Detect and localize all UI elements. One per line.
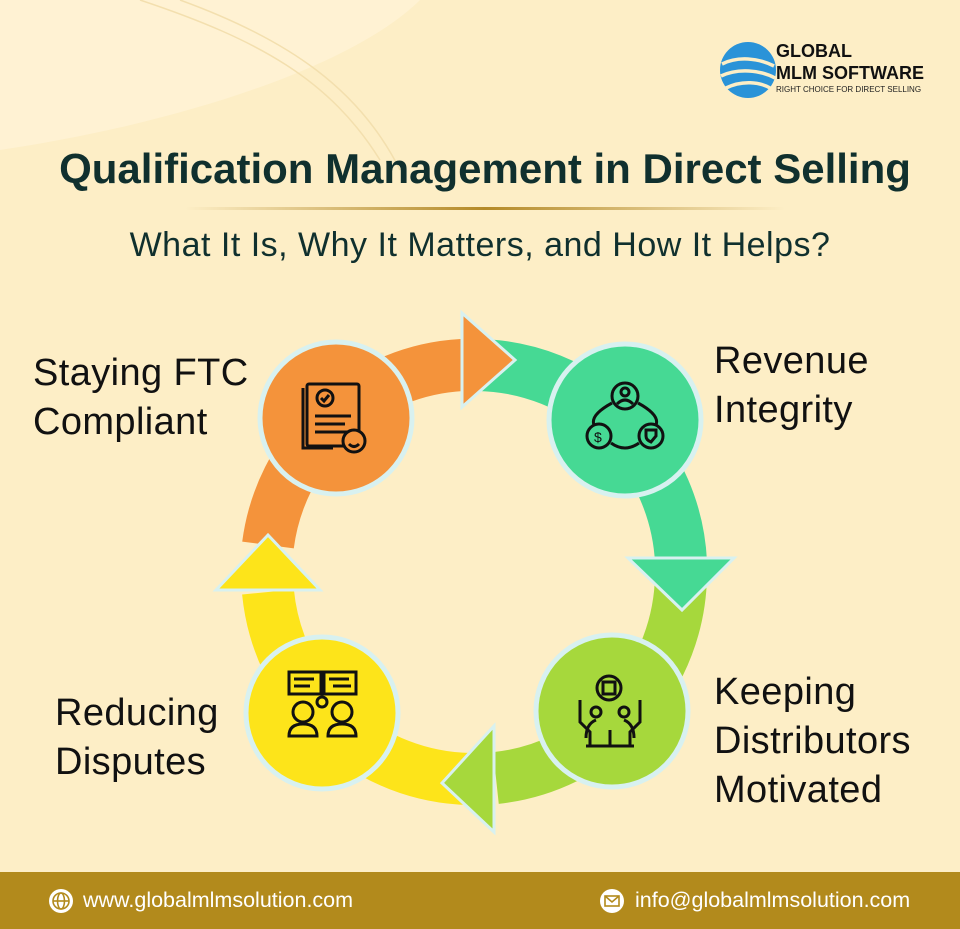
circle: lime with icon bbox=[536, 635, 688, 787]
arrow: orange head bbox=[462, 313, 515, 407]
subtitle: What It Is, Why It Matters, and How It Helps? bbox=[130, 226, 830, 264]
label: Keeping Distributors Motivated: Motivated bbox=[714, 769, 882, 811]
logo text: MLM SOFTWARE bbox=[776, 63, 924, 83]
label: Reducing Disputes: Disputes bbox=[55, 741, 206, 783]
arc: lime bbox=[496, 575, 681, 778]
label: Reducing Disputes bbox=[55, 692, 219, 783]
label: Reducing Disputes: Reducing bbox=[55, 692, 219, 734]
title: Qualification Management in Direct Selling bbox=[59, 145, 911, 192]
icon: email bbox=[600, 889, 624, 913]
logo bbox=[720, 41, 924, 98]
icon: web bbox=[49, 889, 73, 913]
arrow: yellow head bbox=[216, 535, 320, 590]
logo text bbox=[776, 41, 924, 83]
tagline: RIGHT CHOICE FOR DIRECT SELLING bbox=[776, 85, 921, 94]
arc: green bbox=[478, 365, 681, 562]
circle: green with icon bbox=[549, 344, 701, 496]
circle: green with icon: $ bbox=[594, 429, 602, 445]
icon: globe bbox=[720, 42, 776, 98]
label: Keeping Distributors Motivated: Keeping bbox=[714, 671, 856, 713]
label: Staying FTC Compliant: Compliant bbox=[33, 401, 208, 443]
label: Revenue Integrity: Revenue bbox=[714, 340, 869, 382]
label: Staying FTC Compliant bbox=[33, 352, 249, 443]
email text: info@globalmlmsolution.com bbox=[635, 888, 910, 912]
label: Keeping Distributors Motivated: Distributors bbox=[714, 720, 911, 762]
logo text: GLOBAL bbox=[776, 41, 852, 61]
circle: orange with icon bbox=[260, 342, 412, 494]
arrow: green head bbox=[628, 558, 734, 610]
arc: orange bbox=[268, 365, 462, 545]
arrow: lime head bbox=[442, 726, 494, 832]
divider bbox=[185, 207, 785, 210]
circle: yellow with icon bbox=[246, 637, 398, 789]
label: Revenue Integrity: Integrity bbox=[714, 389, 853, 431]
label: Keeping Distributors Motivated bbox=[714, 671, 911, 811]
website text: www.globalmlmsolution.com bbox=[83, 888, 353, 912]
label: Revenue Integrity bbox=[714, 340, 869, 431]
label: Staying FTC Compliant: Staying FTC bbox=[33, 352, 249, 394]
arc: yellow bbox=[268, 592, 470, 779]
footer bbox=[0, 872, 960, 929]
